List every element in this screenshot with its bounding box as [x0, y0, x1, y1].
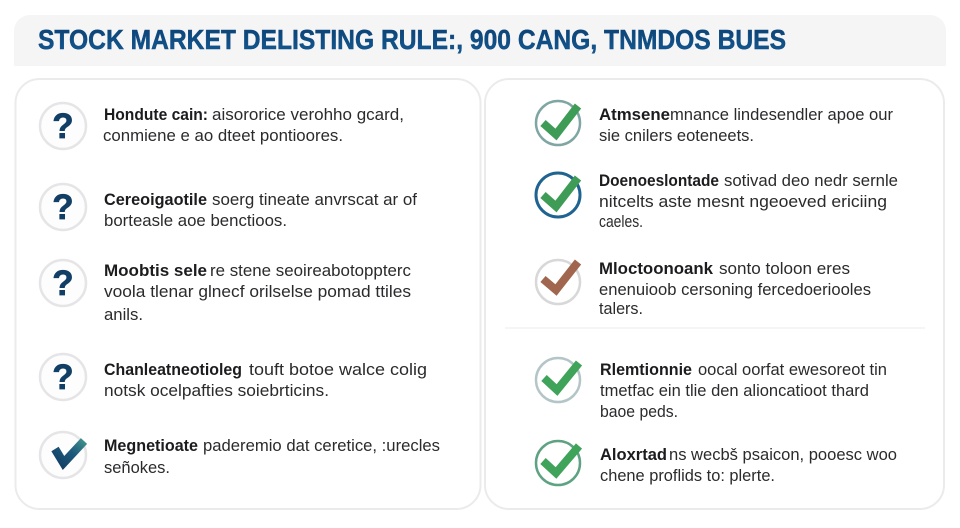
text block: ns wecbš psaicon, pooesc woo — [669, 446, 897, 464]
icon: question mark: ? — [52, 188, 74, 227]
text block: voola tlenar glnecf orilselse pomad ttiles — [104, 283, 411, 301]
text block: enenuioob cersoning fercedoeriooles — [599, 281, 871, 299]
text block — [104, 191, 417, 230]
text block: conmiene e ao dteet pontioores. — [103, 127, 343, 145]
header band — [14, 15, 946, 66]
left item 1 — [40, 103, 404, 149]
text block: anils. — [104, 306, 143, 324]
text block: Rlemtionnie — [600, 361, 692, 379]
text block: paderemio dat ceretice, :urecles — [203, 437, 440, 455]
text block — [103, 106, 404, 145]
icon: question mark — [40, 260, 86, 306]
icon: question mark — [40, 184, 86, 230]
text block: notsk ocelpafties soiebrticins. — [104, 382, 329, 400]
right item 4 — [536, 358, 887, 421]
title: STOCK MARKET DELISTING RULE:, 900 CANG, TNMDOS BUES — [38, 24, 786, 55]
icon: green check — [536, 441, 580, 485]
icon: question mark — [40, 354, 86, 400]
text block: señokes. — [104, 459, 170, 477]
text block: Megnetioate — [104, 437, 198, 455]
text block: touft botoe walce colig — [249, 361, 427, 379]
text block: sie cnilers eoteneets. — [599, 127, 754, 145]
left item 3 — [40, 260, 411, 324]
right item 3 — [536, 260, 871, 318]
text block — [599, 260, 871, 318]
icon: question mark: ? — [52, 107, 74, 146]
icon: question mark: ? — [52, 358, 74, 397]
text block: chene proflids to: plerte. — [600, 467, 775, 485]
icon: green check — [536, 101, 580, 145]
icon: question mark: ? — [52, 264, 74, 303]
text block: tmetfac ein tlie den alioncatioot thard — [600, 382, 869, 400]
right item 1 — [536, 101, 893, 145]
icon: green check — [536, 358, 580, 402]
text block — [600, 361, 887, 421]
icon: navy check — [40, 432, 86, 478]
text block — [104, 361, 427, 400]
text block — [600, 446, 897, 485]
text block: oocal oorfat ewesoreot tin — [698, 361, 887, 379]
text block: Chanleatneotioleg — [104, 361, 242, 379]
text block: mnance lindesendler apoe our — [670, 106, 893, 124]
panel: left — [16, 79, 480, 509]
text block — [104, 262, 411, 324]
right item 5 — [536, 441, 897, 485]
text block — [599, 106, 893, 145]
text block: sonto toloon eres — [719, 260, 850, 278]
icon: question mark — [40, 103, 86, 149]
text block: nitcelts aste mesnt ngeoeved ericiing — [599, 193, 887, 211]
text block: baoe peds. — [600, 403, 678, 421]
text block — [599, 172, 898, 231]
icon: green check, blue ring — [536, 173, 580, 217]
left item 4 — [40, 354, 427, 400]
text block: Hondute cain: — [104, 106, 208, 124]
text block — [104, 437, 440, 477]
right item 2 — [536, 172, 898, 231]
text block: borteasle aoe benctioos. — [104, 212, 287, 230]
text block: Doenoeslontade — [599, 172, 719, 190]
panel: right — [485, 79, 944, 509]
text block: Cereoigaotile — [104, 191, 207, 209]
text block: re stene seoireabotoppterc — [210, 262, 411, 280]
text block: caeles. — [599, 213, 643, 231]
text block: aisororice verohho gcard, — [212, 106, 404, 124]
text block: soerg tineate anvrscat ar of — [212, 191, 417, 209]
left item 2 — [40, 184, 417, 230]
icon: brown check — [536, 260, 580, 304]
left item 5 — [40, 432, 440, 478]
text block: talers. — [599, 300, 643, 318]
text block: Moobtis sele — [104, 262, 207, 280]
text block: Atmsene — [599, 106, 670, 124]
text block: Aloxrtad — [600, 446, 667, 464]
text block: sotivad deo nedr sernle — [724, 172, 898, 190]
text block: Mloctoonoank — [599, 260, 714, 278]
